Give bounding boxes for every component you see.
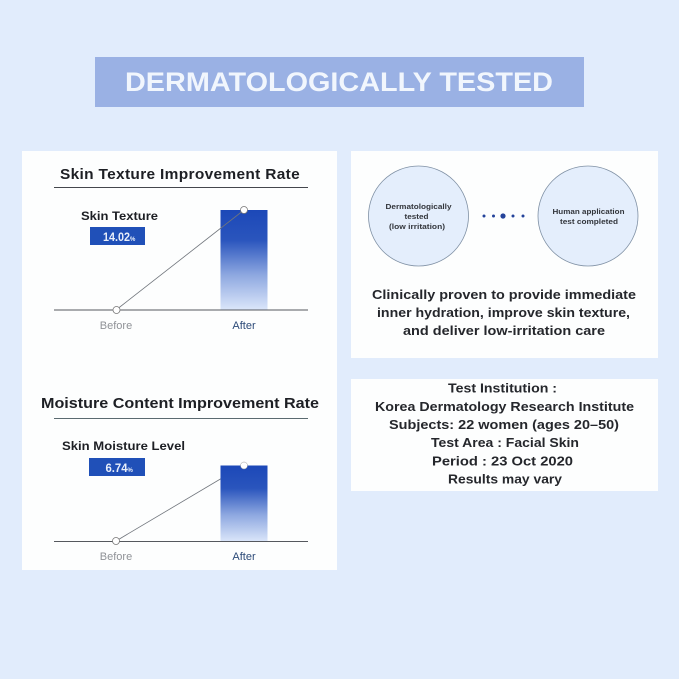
chart: skin texture <box>54 206 308 332</box>
title banner <box>95 57 584 107</box>
panel: clinical claims <box>351 151 658 358</box>
test details text: Subjects: 22 women (ages 20–50) <box>389 417 619 432</box>
circle: dermatologically tested: Dermatologically <box>386 202 452 211</box>
circle: dermatologically tested: tested <box>404 212 429 221</box>
panel: test details <box>351 379 658 491</box>
dots connector <box>482 213 524 219</box>
circle: human application <box>538 166 638 266</box>
claim text: inner hydration, improve skin texture, <box>377 305 630 320</box>
chart: skin texture: Before <box>100 320 132 332</box>
chart: moisture: Before <box>100 551 132 563</box>
panel: improvement charts <box>22 151 337 570</box>
chart: moisture <box>54 441 308 563</box>
test details text: Test Area : Facial Skin <box>431 435 579 450</box>
test details text <box>375 380 634 486</box>
chart: moisture: % <box>128 468 134 474</box>
chart: skin texture: After <box>232 320 256 332</box>
claim text: Clinically proven to provide immediate <box>372 287 636 302</box>
circle: human application: test completed <box>560 217 618 226</box>
title banner: DERMATOLOGICALLY TESTED <box>125 67 553 97</box>
chart: moisture: Skin Moisture Level <box>62 441 185 453</box>
test details text: Results may vary <box>448 472 563 486</box>
circle: human application: Human application <box>552 207 625 216</box>
heading: moisture content: Moisture Content Improvement Rate <box>41 396 319 412</box>
test details text: Korea Dermatology Research Institute <box>375 399 634 414</box>
circle: dermatologically tested <box>368 166 468 266</box>
circle: dermatologically tested: (low irritation) <box>389 222 446 231</box>
chart: skin texture: Skin Texture <box>81 211 158 223</box>
test details text: Test Institution : <box>448 380 557 396</box>
chart: skin texture: % <box>130 237 136 243</box>
chart: moisture: 6.74 <box>106 461 128 475</box>
heading: skin texture: Skin Texture Improvement Rate <box>60 167 300 183</box>
claim text: and deliver low-irritation care <box>403 323 605 338</box>
chart: skin texture: 14.02 <box>103 230 130 244</box>
claim text <box>372 287 636 338</box>
test details text: Period : 23 Oct 2020 <box>432 454 573 468</box>
chart: moisture: After <box>232 551 256 563</box>
